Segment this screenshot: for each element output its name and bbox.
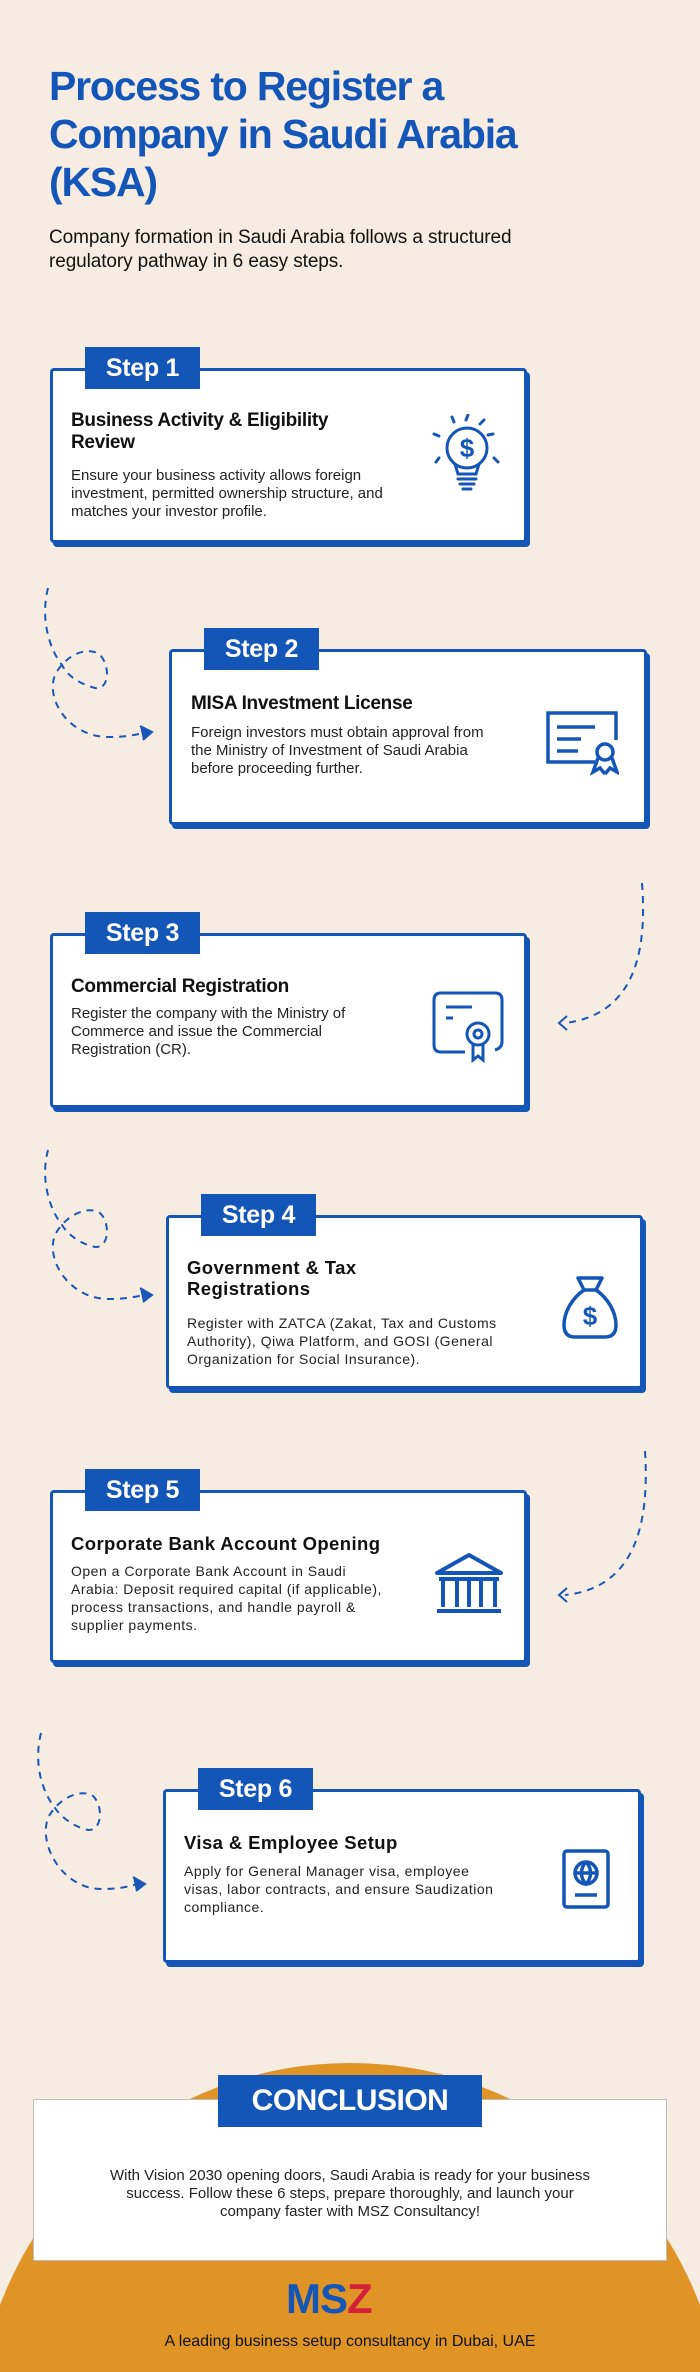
tab: step 4 bbox=[201, 1194, 316, 1236]
tab: step 1 bbox=[85, 347, 200, 389]
text: step 3: Registration (CR). bbox=[71, 1041, 191, 1058]
title: Company in Saudi Arabia bbox=[49, 111, 517, 157]
arrow: step 3 to step 4 bbox=[45, 1150, 152, 1302]
text: step 4: Organization for Social Insurance). bbox=[187, 1351, 420, 1367]
tab: step 6: Step 6 bbox=[219, 1775, 292, 1803]
panel: step 4 bbox=[166, 1215, 643, 1389]
tab: step 1: Step 1 bbox=[106, 354, 179, 382]
arrow: step 2 to step 3 bbox=[559, 883, 643, 1030]
icon: rounded certificate with seal bbox=[432, 992, 504, 1064]
title: (KSA) bbox=[49, 159, 157, 205]
tab: step 3 bbox=[85, 912, 200, 954]
text: step 6: compliance. bbox=[184, 1899, 264, 1915]
text: step 6: visas, labor contracts, and ensure Saudization bbox=[184, 1881, 493, 1897]
heading: conclusion tab bbox=[218, 2075, 482, 2127]
text: step 6 bbox=[184, 1863, 493, 1915]
tab: step 3: Step 3 bbox=[106, 919, 179, 947]
subtitle: Company formation in Saudi Arabia follows a structured bbox=[49, 227, 511, 248]
text: step 6: Apply for General Manager visa, employee bbox=[184, 1863, 469, 1879]
text: step 3: Register the company with the Ministry of bbox=[71, 1005, 345, 1022]
icon: passport bbox=[562, 1849, 610, 1909]
text: step 1: matches your investor profile. bbox=[71, 503, 267, 520]
icon: money bag bbox=[562, 1276, 618, 1339]
text: step 5: Open a Corporate Bank Account in Saudi bbox=[71, 1563, 346, 1579]
text: step 3 bbox=[71, 1005, 346, 1058]
heading: step 1: Review bbox=[71, 432, 135, 453]
text: step 4: Register with ZATCA (Zakat, Tax and Customs bbox=[187, 1315, 497, 1331]
heading: step 1: Business Activity & Eligibility bbox=[71, 410, 328, 431]
text: step 5: Arabia: Deposit required capital (if applicable), bbox=[71, 1581, 382, 1597]
tab: step 5: Step 5 bbox=[106, 1476, 179, 1504]
heading: step 4: Government & Tax bbox=[187, 1257, 357, 1278]
subtitle bbox=[49, 227, 511, 272]
tab: step 5 bbox=[85, 1469, 200, 1511]
text: step 2: the Ministry of Investment of Saudi Arabia bbox=[191, 742, 468, 759]
tab: step 2 bbox=[204, 628, 319, 670]
icon: bank bbox=[435, 1553, 503, 1613]
heading: conclusion tab: CONCLUSION bbox=[252, 2084, 448, 2117]
subtitle: regulatory pathway in 6 easy steps. bbox=[49, 251, 343, 272]
text: step 1 bbox=[71, 467, 383, 520]
heading: step 6: Visa & Employee Setup bbox=[184, 1832, 398, 1853]
text: step 2 bbox=[191, 724, 484, 777]
icon: money bag: $ bbox=[583, 1301, 598, 1331]
title bbox=[49, 63, 518, 205]
text: step 5: supplier payments. bbox=[71, 1617, 198, 1633]
arrow: step 5 to step 6 bbox=[38, 1733, 145, 1891]
heading: step 4 bbox=[187, 1257, 357, 1299]
icon: certificate bbox=[546, 711, 619, 776]
text: step 2: Foreign investors must obtain approval from bbox=[191, 724, 484, 741]
heading: step 5: Corporate Bank Account Opening bbox=[71, 1533, 380, 1554]
arrow: step 1 to step 2 bbox=[45, 588, 152, 740]
panel: step 1 bbox=[50, 368, 527, 543]
text: step 1: Ensure your business activity allows foreign bbox=[71, 467, 361, 484]
tab: step 6 bbox=[198, 1768, 313, 1810]
text: step 2: before proceeding further. bbox=[191, 760, 363, 777]
panel: conclusion bbox=[33, 2099, 667, 2261]
icon: lightbulb dollar bbox=[432, 414, 500, 490]
conclusion text: company faster with MSZ Consultancy! bbox=[220, 2203, 480, 2220]
text: step 1: investment, permitted ownership structure, and bbox=[71, 485, 383, 502]
heading: step 2: MISA Investment License bbox=[191, 693, 413, 714]
orange semicircle background bbox=[0, 2063, 700, 2372]
conclusion text: success. Follow these 6 steps, prepare thoroughly, and launch your bbox=[126, 2185, 574, 2202]
panel: step 6 bbox=[163, 1789, 641, 1963]
tab: step 4: Step 4 bbox=[222, 1201, 295, 1229]
text: step 3: Commerce and issue the Commercial bbox=[71, 1023, 322, 1040]
conclusion text bbox=[110, 2167, 590, 2220]
panel: step 2 bbox=[169, 649, 647, 825]
panel: step 3 bbox=[50, 933, 527, 1108]
text: step 4 bbox=[187, 1315, 497, 1367]
text: step 5 bbox=[71, 1563, 382, 1633]
logo: MSZ: MSZ bbox=[286, 2275, 372, 2322]
icon: lightbulb dollar: $ bbox=[460, 433, 475, 463]
heading: step 1 bbox=[71, 410, 328, 453]
text: step 4: Authority), Qiwa Platform, and GOSI (General bbox=[187, 1333, 493, 1349]
conclusion text: With Vision 2030 opening doors, Saudi Arabia is ready for your business bbox=[110, 2167, 590, 2184]
text: step 5: process transactions, and handle payroll & bbox=[71, 1599, 356, 1615]
heading: step 3: Commercial Registration bbox=[71, 976, 289, 997]
panel: step 5 bbox=[50, 1490, 527, 1663]
tagline: A leading business setup consultancy in Dubai, UAE bbox=[165, 2333, 535, 2350]
arrow: step 4 to step 5 bbox=[559, 1451, 646, 1602]
title: Process to Register a bbox=[49, 63, 443, 109]
heading: step 4: Registrations bbox=[187, 1278, 310, 1299]
tab: step 2: Step 2 bbox=[225, 635, 298, 663]
